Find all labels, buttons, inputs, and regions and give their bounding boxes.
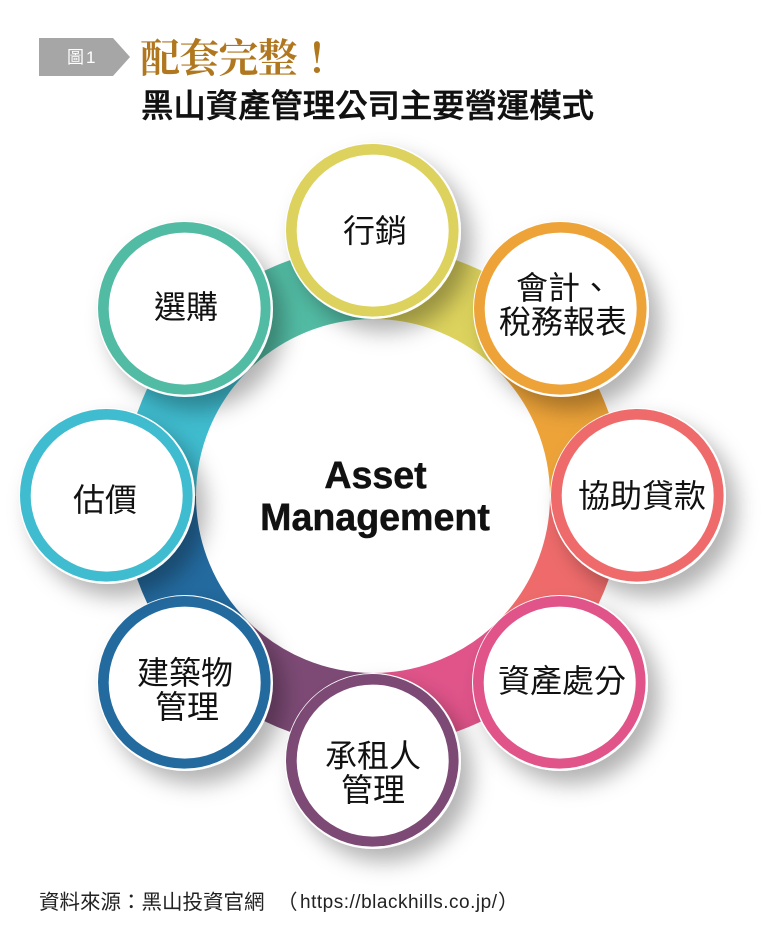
centre label: Asset Management: Management	[260, 496, 490, 538]
header tag: figure 1	[39, 38, 130, 76]
subtitle: 黑山資產管理公司主要營運模式	[141, 88, 594, 124]
node: 會計、稅務報表: 稅務報表	[499, 304, 627, 340]
node: 資產處分: 資產處分	[498, 663, 626, 699]
node: 協助貸款: 協助貸款	[578, 478, 706, 514]
source note: ）	[498, 891, 518, 914]
node: 建築物管理: 建築物	[137, 655, 233, 691]
source note: （	[277, 891, 298, 914]
node: 承租人管理: 承租人	[325, 738, 421, 774]
source note: 資料來源：黑山投資官網	[39, 891, 264, 914]
node: 協助貸款	[550, 408, 726, 584]
header tag: figure 1: 圖1	[67, 48, 97, 67]
source note	[39, 891, 518, 914]
source note: https://blackhills.co.jp/	[300, 892, 498, 913]
node: 建築物管理	[97, 595, 273, 771]
node: 會計、稅務報表	[473, 221, 649, 397]
node: 建築物管理: 管理	[155, 689, 219, 725]
node: 資產處分	[472, 595, 648, 771]
node: 估價: 估價	[73, 482, 137, 518]
node: 選購: 選購	[154, 289, 218, 325]
node: 行銷	[285, 143, 461, 319]
node: 行銷: 行銷	[343, 213, 407, 249]
node: 承租人管理	[285, 673, 461, 849]
title: 配套完整！	[140, 36, 337, 81]
ring of coloured segments	[160, 282, 587, 710]
node: 承租人管理: 管理	[341, 772, 405, 808]
centre label: Asset Management	[260, 454, 490, 538]
centre label: Asset Management: Asset	[324, 454, 427, 496]
node: 會計、稅務報表: 會計、	[516, 270, 612, 306]
node: 選購	[97, 221, 273, 397]
node: 估價	[19, 408, 195, 584]
